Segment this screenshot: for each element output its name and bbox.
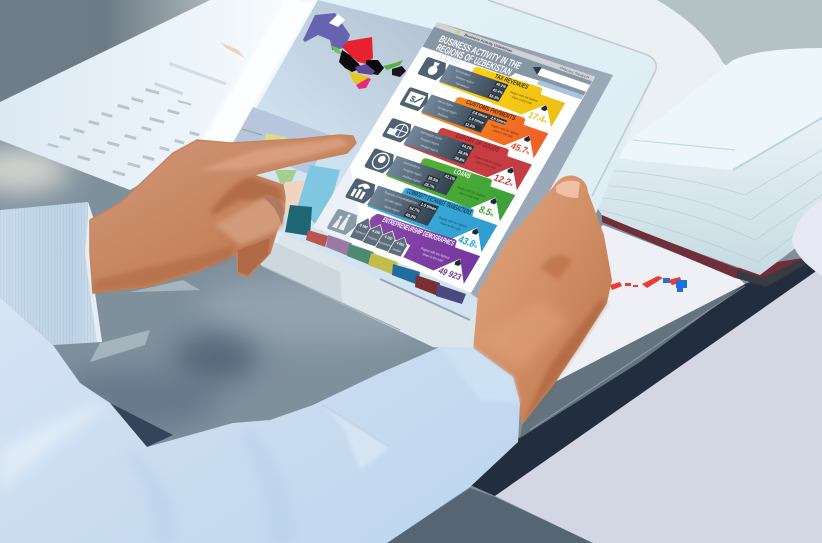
- data panel: Surxondaryo: [455, 69, 472, 77]
- paper: lower chart sheet: [470, 225, 745, 381]
- logo: CERR: [438, 52, 462, 67]
- data panel: Andijan region: [402, 174, 422, 184]
- data panel: 44.1%: [461, 143, 474, 151]
- band: entrepreneurship demographics: 49 923: [436, 265, 464, 282]
- data panel: 54.7%: [408, 205, 421, 214]
- tablet: [200, 0, 656, 352]
- band: customs payments: Region with the highest: [490, 123, 520, 136]
- data panel: Sirdaryo region: [455, 75, 475, 85]
- data panel: Jizzakh region: [384, 197, 403, 207]
- band: customs payments: share in the total: [492, 128, 514, 139]
- data panel: Andijan region: [420, 143, 439, 153]
- reflected bar chart: [233, 107, 466, 304]
- data panel: [421, 94, 491, 133]
- houses: Samarkand: [378, 240, 393, 248]
- data panel: 2.8 times: [471, 109, 489, 119]
- band: customs payments: CUSTOMS PAYMENTS: [464, 99, 517, 122]
- book: [590, 48, 822, 287]
- data panel: Bukhara: [437, 112, 449, 119]
- browser bar: [434, 22, 595, 81]
- data panel: Samarkand: [455, 81, 471, 90]
- paper: lower right sheet: [495, 267, 822, 543]
- data panel: 36.5%: [457, 149, 470, 157]
- tablet frame around infographic: [437, 22, 613, 305]
- curved page behind the book: [470, 0, 740, 200]
- band: commodity exchange transactions: 43.8%: [455, 234, 481, 251]
- data panel: [439, 64, 508, 102]
- tablet screen: [210, 0, 613, 320]
- band: tax revenues: share in the total: [511, 95, 533, 105]
- header strip: [421, 27, 592, 103]
- data panel: 1.5 times: [420, 202, 438, 212]
- band: tax revenues: Region with the highest: [509, 90, 539, 103]
- tablet bezel: [205, 0, 656, 352]
- browser bar: Business Activity Uzbekistan: [463, 33, 513, 53]
- map of Uzbekistan: [303, 13, 406, 89]
- tag: 2.5 times: [490, 115, 507, 125]
- houses: [348, 215, 415, 257]
- shirt sleeve: [0, 297, 520, 543]
- white left bezel: [200, 0, 318, 143]
- band: export of goods: Region with the highest: [473, 154, 503, 168]
- band: loans: [360, 141, 519, 222]
- icon box: [417, 57, 450, 82]
- band: export of goods: 12.2%: [492, 173, 516, 188]
- title: BUSINESS ACTIVITY IN THE: [437, 34, 523, 72]
- band: entrepreneurship demographics: ENTREPRENEURSHIP DEMOGRAPHICS: [381, 217, 456, 248]
- data panel: 40.3%: [404, 212, 418, 220]
- band: customs payments: [396, 80, 552, 158]
- icon box: [326, 208, 362, 237]
- icon box: $: [408, 94, 418, 104]
- data panel: Republic of Karakalpakstan: [384, 190, 419, 206]
- data panel: Navoi region: [383, 204, 401, 213]
- data panel: 1.9 times: [468, 115, 485, 125]
- band: commodity exchange transactions: COMMODITY EXCHANGE TRANSACTIONS: [405, 188, 473, 217]
- data panel: Syrdarya region: [437, 105, 458, 116]
- band: loans: LOANS: [452, 168, 472, 180]
- houses: Fergana: [367, 235, 378, 242]
- band: loans: 8.5%: [477, 204, 497, 219]
- icon box: [382, 118, 415, 144]
- desk lower section: [387, 488, 593, 543]
- data panel: [367, 185, 439, 226]
- infographic sheet: [313, 22, 595, 293]
- rolled paper on the right: [792, 200, 822, 276]
- band: loans: share in the total: [458, 191, 480, 201]
- band: tax revenues: [414, 50, 569, 127]
- band: commodity exchange transactions: [340, 170, 501, 253]
- left cuff: [0, 202, 102, 345]
- dark desk edge strip: [470, 260, 822, 496]
- icon box: [364, 148, 398, 175]
- band: entrepreneurship demographics: [322, 201, 484, 284]
- left hand pointing: [90, 135, 356, 293]
- band: entrepreneurship demographics: Region with the highest: [420, 246, 451, 260]
- data panel: [404, 125, 474, 164]
- houses: 4 150: [371, 229, 381, 235]
- data panel: 49.2%: [495, 82, 507, 89]
- band: export of goods: EXPORT OF GOODS: [454, 133, 501, 154]
- band: commodity exchange transactions: Region with the highest: [438, 215, 468, 229]
- houses: 8 190: [359, 223, 369, 230]
- data panel: [386, 156, 457, 195]
- header strip: REGIONS OF UZBEKISTAN: [434, 43, 514, 78]
- table reflections: [90, 280, 200, 362]
- data panel: 11.5%: [464, 121, 477, 129]
- band: loans: Region with the highest: [456, 185, 486, 199]
- data panel: Fergana region: [420, 137, 440, 147]
- data panel: 39.5%: [427, 175, 440, 183]
- browser bar: Places Search: [559, 66, 590, 80]
- data panel: Namangan region: [420, 130, 443, 141]
- houses: Andijan: [392, 247, 402, 254]
- band: export of goods: [378, 111, 536, 190]
- dark strip under sleeve: [110, 403, 173, 447]
- tablet lower edge: [262, 233, 478, 352]
- data panel: Fergana region: [402, 167, 423, 177]
- band: export of goods: share in the total: [475, 160, 497, 170]
- band: customs payments: 45.7%: [509, 141, 533, 156]
- houses: Tashkent: [354, 229, 366, 236]
- data panel: 42.4%: [492, 88, 504, 95]
- data panel: 38.8%: [454, 155, 466, 163]
- data panel: 42.1%: [444, 173, 457, 182]
- data panel: 28.7%: [423, 181, 436, 190]
- houses: 4 152: [384, 235, 393, 241]
- chart: candlesticks: [610, 276, 687, 292]
- data panel: Navoi region: [437, 99, 454, 108]
- band: tax revenues: TAX REVENUES: [493, 73, 530, 91]
- data panel: 52.3%: [488, 94, 501, 101]
- band: tax revenues: 17.4%: [526, 110, 551, 125]
- band: entrepreneurship demographics: share in the total: [422, 252, 444, 263]
- data panel: Surkhandarya: [402, 160, 422, 170]
- houses: 4 051: [396, 241, 405, 247]
- band: commodity exchange transactions: share in the total: [439, 221, 462, 232]
- icon box: [345, 178, 379, 205]
- paper: left document with table: [0, 0, 340, 190]
- icon box: [399, 87, 433, 113]
- right hand holding tablet: [473, 175, 612, 425]
